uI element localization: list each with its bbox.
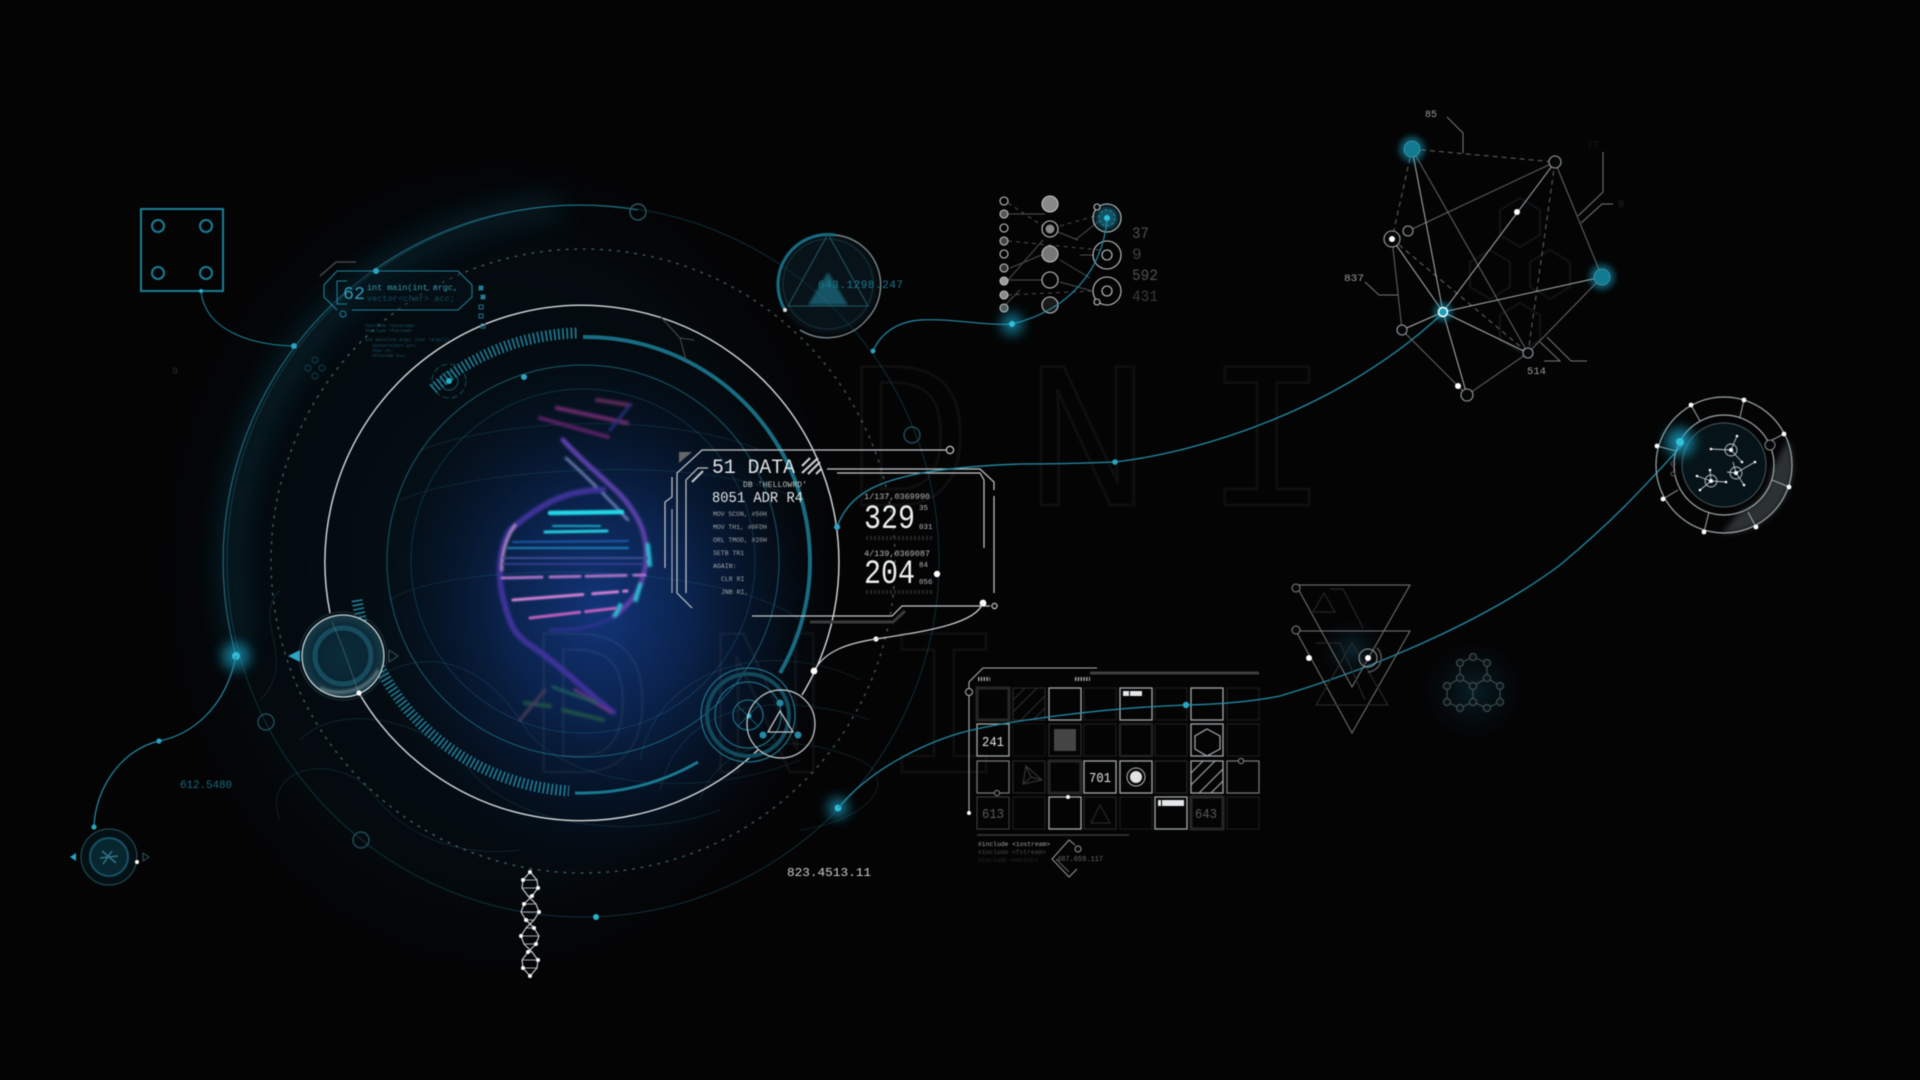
- small DNA icon: [521, 872, 539, 976]
- network polyhedron: 9: [1618, 200, 1624, 211]
- code label: #include <iostream>: [365, 324, 415, 329]
- DNA helix: [500, 400, 650, 720]
- panel: data readout: 031: [919, 524, 933, 532]
- triangle scope: [778, 234, 903, 338]
- panel: cell grid: 643: [1195, 807, 1217, 823]
- network polyhedron: 514: [1527, 367, 1546, 378]
- dotted orbit: [271, 249, 895, 873]
- text: dim number: 9: [172, 367, 178, 378]
- contour lines: [260, 424, 878, 852]
- icon: square with four circles: [141, 209, 297, 349]
- node diagram numbers: 37: [1132, 225, 1149, 243]
- panel: data readout: 4/139,0369087: [864, 549, 930, 559]
- network polyhedron: 85: [1425, 110, 1437, 121]
- code label: int main(int argc, char *argv[]): [365, 338, 449, 343]
- code label: vector<char> arr;: [372, 344, 417, 349]
- panel: data readout: 8051 ADR R4: [712, 490, 803, 507]
- ghost letters: DNI: [527, 598, 1007, 836]
- panel: cell grid: #include <iostream>: [978, 841, 1050, 848]
- code label: #include <fstream>: [365, 329, 413, 334]
- background glow: [150, 145, 850, 985]
- panel: data readout: 51 DATA: [712, 457, 795, 480]
- small node icons on rings: [258, 204, 920, 848]
- network polyhedron: 77: [1587, 141, 1599, 152]
- code label: 62: [343, 285, 365, 305]
- panel: data readout: ORL TMOD, #20H: [713, 537, 767, 544]
- node diagram: [1000, 196, 1121, 313]
- panel: data readout: 056: [919, 579, 933, 587]
- panel: data readout: CLR RI: [721, 576, 745, 583]
- code label: [320, 262, 485, 359]
- concentric rings: [357, 333, 810, 793]
- code label: char ch;: [372, 349, 393, 354]
- panel: data readout: 84: [919, 562, 929, 570]
- connector: teal line grid to right dial: [828, 443, 1684, 818]
- panel: data readout: AGAIN:: [713, 563, 736, 570]
- node diagram numbers: 431: [1132, 288, 1158, 306]
- panel: data readout: MOV SCON, #50H: [713, 511, 767, 518]
- node diagram numbers: 592: [1132, 267, 1158, 285]
- code label: vector<char> acc;: [367, 294, 455, 304]
- network polyhedron: 837: [1344, 274, 1364, 285]
- panel: data readout: 329: [864, 501, 915, 539]
- connector: white curve to data panel: [811, 603, 983, 674]
- panel: data readout: 35: [919, 505, 929, 513]
- panel: cell grid: [966, 668, 1259, 877]
- panel: data readout: MOV TH1, #0FDH: [713, 524, 767, 531]
- panel: cell grid: 241: [982, 735, 1004, 751]
- cluster: teal rings and triangle: [701, 668, 815, 762]
- white main ring: [325, 305, 839, 821]
- ghost letters: [527, 331, 1330, 836]
- hexagon molecule: [1423, 640, 1523, 740]
- panel: data readout: JNB RI,: [721, 589, 748, 596]
- glowing node left with connector and small dial: [70, 642, 250, 885]
- panel: data readout: SETB TR1: [713, 550, 744, 557]
- panel: cell grid: 487.659.117: [1057, 856, 1103, 864]
- right dial: [1655, 397, 1793, 534]
- code label: ofstream ins;: [372, 354, 406, 359]
- triangle scope: 643.1298.247: [818, 280, 903, 292]
- node diagram numbers: [1132, 225, 1158, 306]
- outer teal orbit: [223, 205, 939, 917]
- lens ball left: [288, 612, 398, 700]
- panel: cell grid: #include <vector>: [978, 857, 1038, 864]
- network polyhedron: [1344, 110, 1624, 401]
- panel: cell grid: 613: [982, 807, 1004, 823]
- ghost letters: DNI: [845, 331, 1330, 569]
- panel: cell grid: 701: [1089, 771, 1111, 787]
- node diagram numbers: 9: [1132, 246, 1142, 264]
- connector: node diagram to orbit: [871, 220, 1107, 353]
- triangles: [1292, 584, 1410, 733]
- panel: data readout: 1/137,0369990: [864, 492, 930, 502]
- text: 612.5480: 612.5480: [180, 780, 232, 792]
- panel: data readout: [665, 446, 997, 642]
- text: 823.4513.11: 823.4513.11: [787, 867, 871, 880]
- panel: data readout: 204: [864, 556, 915, 594]
- code label: int main(int argc,: [367, 283, 458, 293]
- panel: cell grid: #include <fstream>: [978, 849, 1046, 856]
- panel: data readout: DB 'HELLOWRD': [743, 481, 807, 490]
- connector: teal line data panel to network: [834, 312, 1444, 530]
- teal dot bottom orbit: [593, 914, 599, 920]
